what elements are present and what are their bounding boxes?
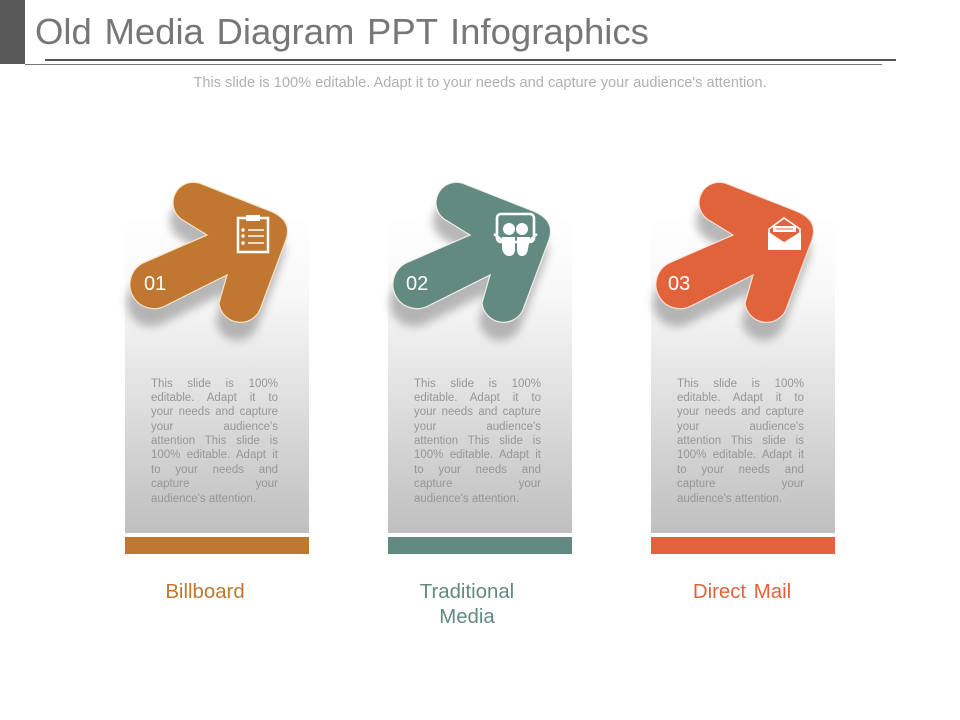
text block: direct mail (677, 378, 804, 505)
text block: billboard (151, 378, 278, 505)
text block: direct mail: 100% editable. Adapt it (677, 449, 804, 461)
icon: open envelope (768, 218, 801, 250)
text block: traditional media: attention This slide is (414, 435, 541, 447)
label: traditional media: Media (439, 606, 495, 628)
panel: direct mail background (651, 215, 835, 533)
colour bar: traditional media (388, 537, 572, 554)
text block: billboard: your audience's (151, 421, 278, 433)
arrow 01: billboard (127, 182, 288, 340)
text block: traditional media: your audience's (414, 421, 541, 433)
number 02: 02 (406, 273, 428, 295)
title underline (45, 59, 896, 61)
subtitle: This slide is 100% editable. Adapt it to your needs and capture your audience's attention. (193, 74, 767, 90)
text block: direct mail: attention This slide is (677, 435, 804, 447)
text block: billboard: 100% editable. Adapt it (151, 449, 278, 461)
number 03: 03 (668, 273, 690, 295)
text block: direct mail: This slide is 100% (677, 378, 804, 390)
text block: billboard: audience's attention. (151, 493, 256, 505)
text block: direct mail: to your needs and (677, 464, 804, 476)
text block: direct mail: capture your (677, 478, 804, 490)
text block: traditional media: capture your (414, 478, 541, 490)
text block: traditional media: to your needs and (414, 464, 541, 476)
text block: billboard: to your needs and (151, 464, 278, 476)
text block: billboard: This slide is 100% (151, 378, 278, 390)
title: Old Media Diagram PPT Infographics (35, 11, 649, 52)
text block: direct mail: your audience's (677, 421, 804, 433)
text block: traditional media: This slide is 100% (414, 378, 541, 390)
label: billboard: Billboard (165, 581, 245, 603)
number 01: 01 (144, 273, 166, 295)
text block: billboard: editable. Adapt it to (151, 392, 278, 404)
arrow 02: traditional media (390, 182, 551, 340)
text block: direct mail: audience's attention. (677, 493, 782, 505)
text block: traditional media: 100% editable. Adapt it (414, 449, 541, 461)
label: direct mail: Direct Mail (693, 581, 791, 603)
text block: traditional media: your needs and capture (414, 406, 541, 418)
text block: traditional media: editable. Adapt it to (414, 392, 541, 404)
icon: slideshare (494, 214, 537, 256)
text block: billboard: attention This slide is (151, 435, 278, 447)
text block: traditional media: audience's attention. (414, 493, 519, 505)
text block: billboard: capture your (151, 478, 278, 490)
text block: billboard: your needs and capture (151, 406, 278, 418)
label: traditional media: Traditional (420, 581, 514, 603)
colour bar: billboard (125, 537, 309, 554)
title bar accent (0, 0, 25, 64)
text block: traditional media (414, 378, 541, 505)
panel: traditional media background (388, 215, 572, 533)
icon: clipboard checklist (238, 215, 268, 252)
text block: direct mail: your needs and capture (677, 406, 804, 418)
panel: billboard background (125, 215, 309, 533)
arrow 03: direct mail (653, 182, 814, 340)
text block: direct mail: editable. Adapt it to (677, 392, 804, 404)
label: traditional media (420, 581, 514, 628)
colour bar: direct mail (651, 537, 835, 554)
